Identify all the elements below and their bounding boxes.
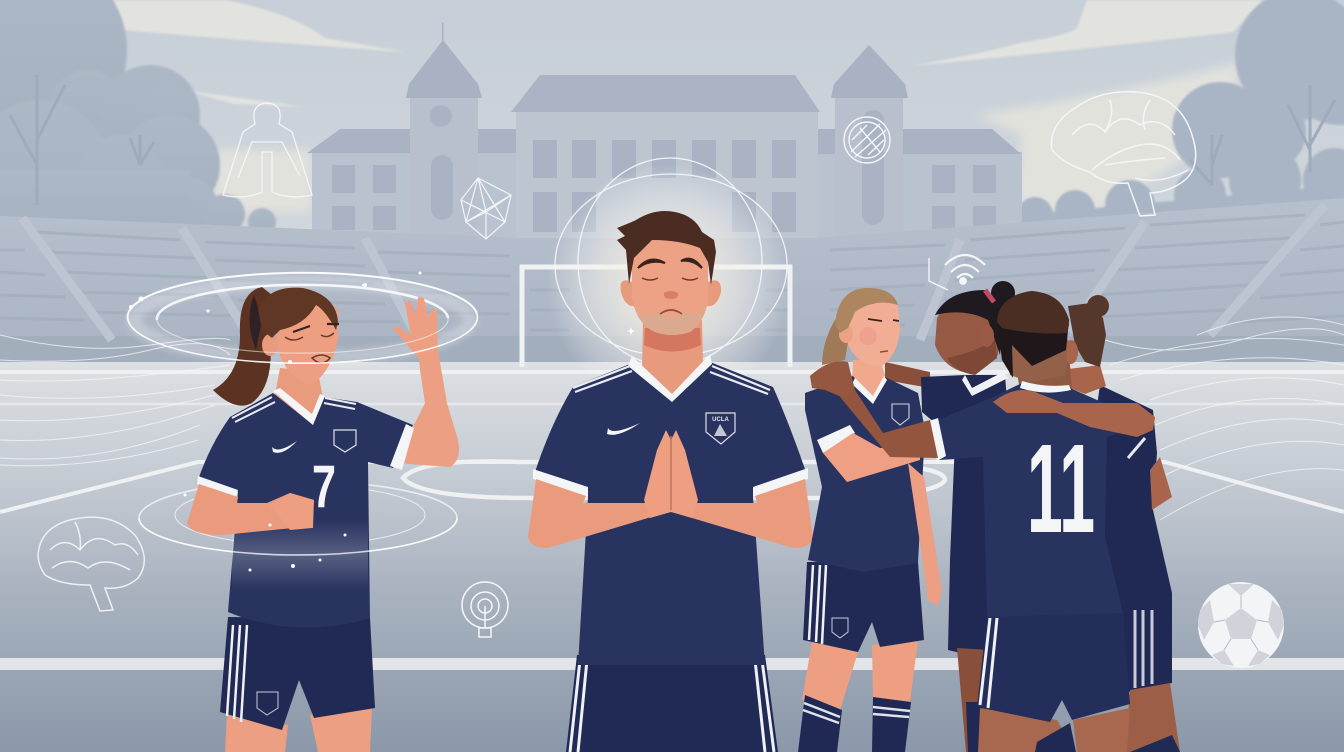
hair [997, 291, 1069, 378]
legs [978, 708, 1130, 752]
icon: crystal polyhedron [461, 178, 511, 239]
soccer field [0, 362, 1344, 752]
university building [307, 22, 1022, 242]
number seven: 7 [312, 453, 336, 520]
jersey [805, 376, 925, 572]
shorts [803, 562, 924, 652]
head [1000, 320, 1068, 382]
sleeve cuff [929, 418, 946, 461]
head [847, 301, 900, 366]
icon: ball globe [844, 117, 890, 163]
crest: UCLA [712, 417, 729, 423]
soccer goal [522, 267, 790, 367]
hair [1068, 303, 1106, 367]
swoosh [607, 423, 640, 435]
flowing energy lines right [1105, 317, 1344, 520]
collar [273, 388, 325, 425]
tree trunks left [10, 75, 154, 205]
hair [258, 288, 338, 338]
arm across back [993, 390, 1155, 437]
neck [1060, 365, 1106, 394]
neck [642, 320, 703, 398]
shorts [220, 617, 375, 730]
icon: brain upper right [1051, 92, 1196, 216]
right group: number 11 player [810, 291, 1155, 752]
lower swirl behind left player [139, 481, 457, 555]
crest [892, 404, 909, 425]
jersey [533, 362, 808, 665]
collar [962, 372, 1008, 396]
hair [835, 288, 898, 333]
hand on shoulder [810, 361, 855, 398]
sleeve cuffs [533, 469, 588, 497]
shorts [977, 612, 1130, 722]
raised arm [395, 345, 459, 467]
crest [706, 413, 735, 444]
face details [285, 333, 334, 363]
field lines [0, 372, 1344, 664]
right group: dark-skinned teammate [885, 281, 1015, 752]
praying hands [644, 430, 698, 518]
legs [225, 708, 372, 752]
head [632, 232, 708, 335]
right group: blond teammate [798, 288, 942, 752]
hair [617, 211, 716, 285]
collar [628, 354, 712, 402]
arms [528, 470, 670, 548]
collar [1020, 381, 1071, 393]
background trees right [1017, 0, 1344, 233]
shorts [566, 655, 778, 752]
icon: brain lower left [38, 517, 144, 611]
icon: abstract figure [223, 103, 312, 197]
sock behind [1035, 723, 1076, 752]
crest left player [334, 430, 356, 452]
flowing energy lines left [0, 335, 230, 466]
socks [798, 695, 911, 752]
right group: far teammate [1060, 295, 1180, 752]
central player [528, 211, 813, 752]
head [935, 301, 1000, 374]
neck [1012, 340, 1072, 390]
number 11: 11 [1027, 418, 1095, 559]
arm behind blond [885, 362, 930, 388]
left swirl front arcs [128, 314, 477, 555]
icon: wifi signal [929, 255, 985, 290]
tree trunks right [1190, 85, 1335, 185]
shoulder stripes [232, 397, 356, 422]
sky background [0, 0, 1344, 380]
ponytail [213, 287, 272, 406]
collar [852, 376, 887, 404]
icon: lightbulb [462, 582, 508, 637]
warm glow patches in the sky [215, 62, 1240, 212]
hanging arm [908, 463, 942, 606]
sparkles [129, 272, 635, 572]
fading jersey glow [232, 520, 368, 590]
rear glow of upper swirl [128, 273, 477, 358]
left player [187, 287, 459, 752]
swoosh left player [272, 441, 297, 453]
face details [638, 259, 702, 268]
icon: soccer ball [1198, 582, 1284, 668]
jersey [198, 393, 413, 628]
forearm [840, 387, 938, 458]
neck [275, 368, 323, 425]
head [277, 294, 338, 385]
clouds [88, 0, 1263, 107]
hand over number [270, 493, 314, 530]
ponytail [822, 315, 850, 365]
neck [852, 360, 885, 402]
ears [620, 280, 636, 306]
jersey [932, 383, 1155, 617]
halo around central player [546, 158, 790, 407]
shoulder stripes [573, 366, 770, 394]
near arm [187, 484, 314, 535]
jersey [921, 375, 1010, 660]
stadium stands [0, 198, 1344, 365]
cuff [817, 425, 855, 453]
hair [935, 290, 1005, 355]
legs [802, 640, 918, 710]
arm [823, 433, 920, 482]
sleeve stripe [390, 424, 414, 470]
background trees left [0, 0, 276, 240]
ear [1064, 340, 1078, 364]
face [868, 319, 899, 321]
leg [957, 648, 990, 752]
hand [393, 297, 438, 362]
